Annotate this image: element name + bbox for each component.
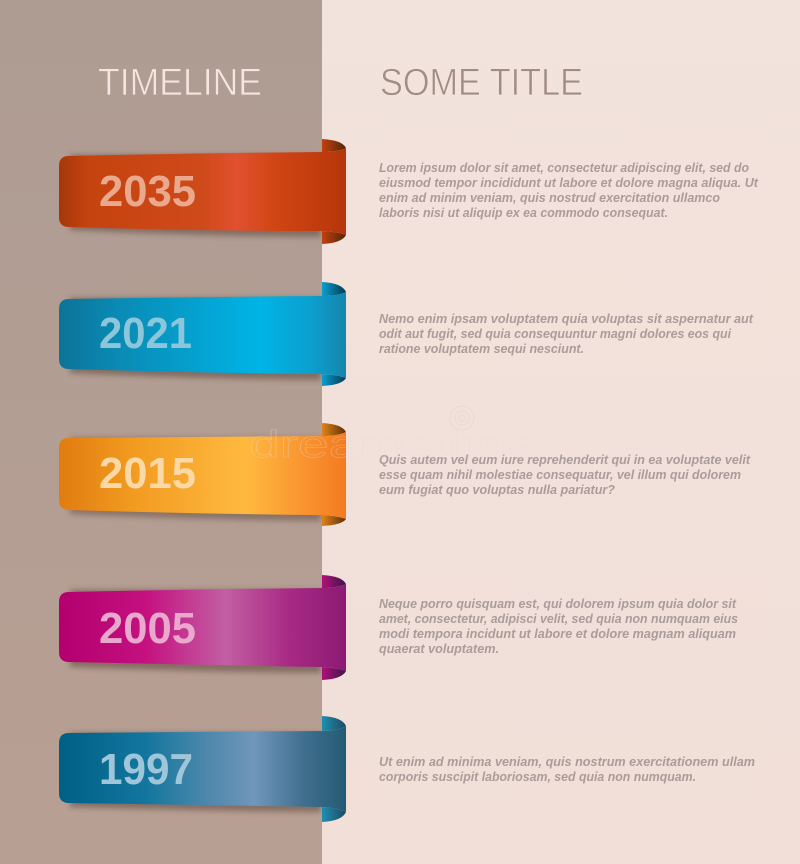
year: 1997 <box>99 745 193 794</box>
watermark: dreamstime <box>249 424 537 466</box>
band <box>59 432 346 519</box>
text block 2015: esse quam nihil molestiae consequatur, vel illum qui dolorem <box>379 468 741 482</box>
text block 1997 <box>379 755 755 784</box>
ribbon 2015 <box>59 423 346 526</box>
text block 2035: laboris nisi ut aliquip ex ea commodo consequat. <box>379 206 668 220</box>
bottom curl <box>322 667 346 680</box>
top curl <box>322 282 346 296</box>
text block 1997: Ut enim ad minima veniam, quis nostrum exercitationem ullam <box>379 755 755 769</box>
text block 2035: enim ad minim veniam, quis nostrud exercitation ullamco <box>379 191 720 205</box>
heading: some title: SOME TITLE <box>380 62 583 104</box>
text block 2035 <box>379 161 759 220</box>
text block 2021 <box>379 312 754 356</box>
top curl <box>322 139 346 152</box>
top curl <box>322 423 346 436</box>
left background panel <box>0 0 322 864</box>
shadow <box>70 298 321 380</box>
ribbon 2005 <box>59 575 346 680</box>
text block 2005: Neque porro quisquam est, qui dolorem ipsum quia dolor sit <box>379 597 737 611</box>
shadow <box>70 733 321 812</box>
year: 2015 <box>99 449 196 498</box>
bottom curl <box>322 374 346 386</box>
text block 2005: amet, consectetur, adipisci velit, sed quia non numquam eius <box>379 612 738 626</box>
text block 2021: ratione voluptatem sequi nesciunt. <box>379 342 584 356</box>
band <box>59 584 346 671</box>
text block 2021: Nemo enim ipsam voluptatem quia voluptas sit aspernatur aut <box>379 312 754 326</box>
top curl <box>322 575 346 588</box>
top curl <box>322 716 346 731</box>
ribbon 2021 <box>59 282 346 386</box>
text block 2015 <box>379 453 751 497</box>
ribbon 1997 <box>59 716 346 822</box>
bottom curl <box>322 231 346 244</box>
text block 2005 <box>379 597 738 656</box>
text block 2015: Quis autem vel eum iure reprehenderit qui in ea voluptate velit <box>379 453 751 467</box>
ribbon 2035 <box>59 139 346 244</box>
bottom curl <box>322 515 346 526</box>
watermark <box>249 406 537 466</box>
year: 2035 <box>99 167 196 216</box>
text block 2005: quaerat voluptatem. <box>379 642 499 656</box>
bottom curl <box>322 807 346 822</box>
shadow <box>70 590 321 673</box>
text block 2021: odit aut fugit, sed quia consequuntur magni dolores eos qui <box>379 327 732 341</box>
text block 1997: corporis suscipit laboriosam, sed quia non numquam. <box>379 770 696 784</box>
text block 2035: Lorem ipsum dolor sit amet, consectetur adipiscing elit, sed do <box>379 161 749 175</box>
year: 2021 <box>99 309 192 358</box>
text block 2005: modi tempora incidunt ut labore et dolore magnam aliquam <box>379 627 736 641</box>
text block 2035: eiusmod tempor incididunt ut labore et dolore magna aliqua. Ut <box>379 176 759 190</box>
band <box>59 148 346 235</box>
shadow <box>70 438 321 521</box>
year: 2005 <box>99 604 196 653</box>
band <box>59 292 346 378</box>
shadow <box>70 155 321 237</box>
text block 2015: eum fugiat quo voluptas nulla pariatur? <box>379 483 615 497</box>
band <box>59 726 346 812</box>
heading: timeline: TIMELINE <box>98 62 262 104</box>
